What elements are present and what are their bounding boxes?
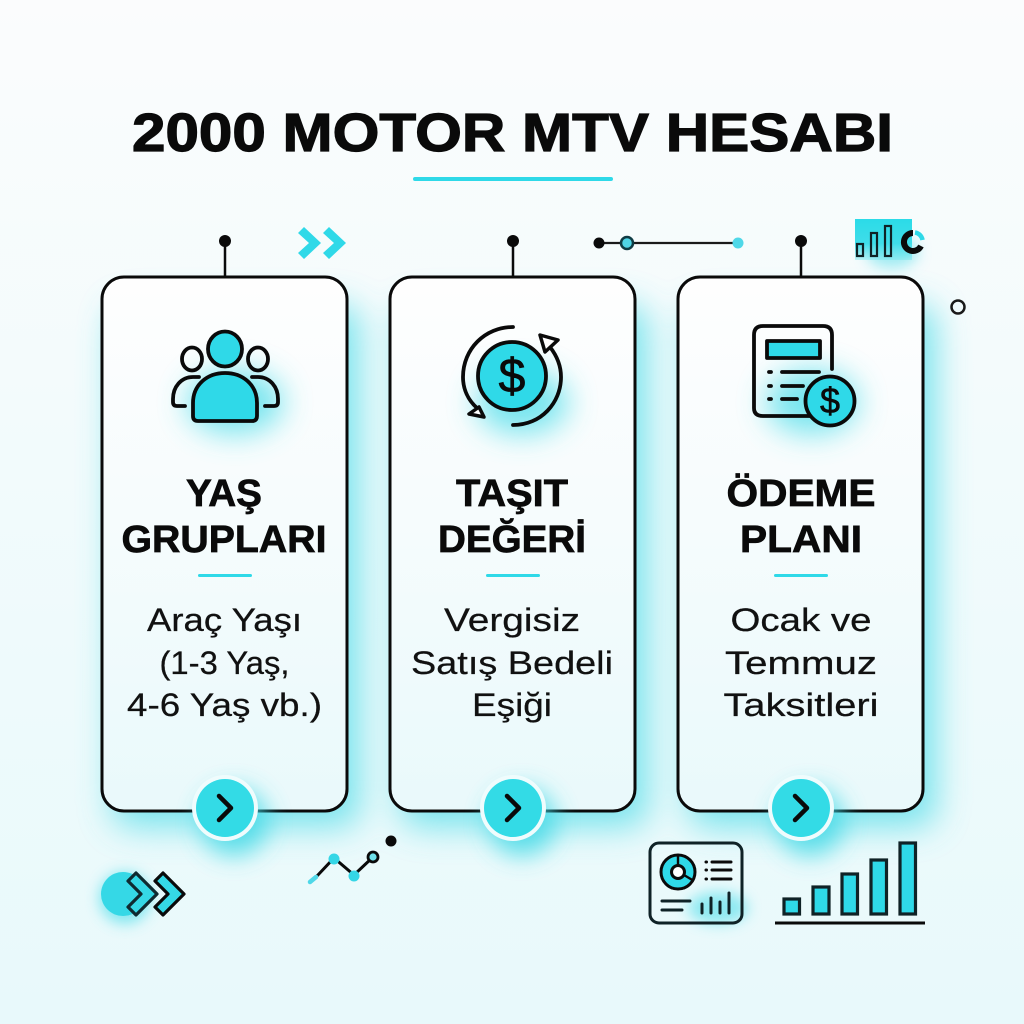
icon: small line chart — [310, 836, 396, 882]
icon glow: calculator — [766, 370, 858, 434]
icon: calculator with dollar: $ — [820, 380, 840, 421]
icon glow: people — [187, 370, 283, 434]
heading: PLANI — [740, 519, 862, 561]
body text: Taksitleri — [724, 687, 878, 723]
icon: circle with double chevrons — [99, 872, 184, 924]
card glows — [112, 305, 936, 827]
connector: card 3 pin — [795, 235, 807, 277]
heading — [122, 473, 326, 561]
body text — [724, 602, 878, 723]
button — [192, 775, 268, 856]
connector: card 2 pin — [507, 235, 519, 277]
small ring — [952, 300, 964, 314]
heading: GRUPLARI — [122, 519, 326, 561]
body text — [127, 602, 322, 723]
heading rule — [198, 574, 252, 577]
heading: DEĞERİ — [438, 517, 586, 561]
button — [768, 775, 844, 856]
heading rule — [774, 574, 828, 577]
body text: Vergisiz — [444, 602, 580, 638]
body text: Eşiği — [472, 687, 552, 723]
body text: Ocak ve — [730, 602, 872, 638]
icon: double chevron top — [298, 227, 346, 259]
heading — [438, 473, 586, 561]
icon: calculator with dollar — [754, 326, 854, 426]
heading: TAŞIT — [456, 473, 568, 515]
icon: people — [173, 332, 278, 421]
heading — [726, 472, 876, 561]
connector: card 1 pin — [219, 235, 231, 277]
panel: ÖDEME PLANI — [678, 277, 923, 856]
heading: ÖDEME — [726, 472, 876, 515]
icon: small bars and donut — [855, 219, 922, 268]
bar chart — [775, 843, 925, 923]
body text: Temmuz — [725, 645, 877, 681]
heading: YAŞ — [186, 473, 262, 515]
body text: (1-3 Yaş, — [160, 645, 290, 681]
panel: YAŞ GRUPLARI — [102, 277, 347, 856]
node line decoration — [594, 237, 744, 249]
body text: Araç Yaşı — [147, 602, 302, 638]
icon: dashboard — [650, 843, 748, 924]
icon: rotating dollar — [463, 327, 561, 425]
title: 2000 MOTOR MTV HESABI — [132, 103, 893, 163]
icon glow: money — [476, 370, 568, 434]
body text: 4-6 Yaş vb.) — [127, 687, 322, 723]
body text — [411, 602, 613, 723]
title underline — [413, 177, 613, 181]
button — [480, 775, 556, 856]
heading rule — [486, 574, 540, 577]
body text: Satış Bedeli — [411, 645, 613, 681]
icon: rotating dollar: $ — [499, 350, 525, 403]
panel: TAŞIT DEĞERİ — [390, 277, 635, 856]
